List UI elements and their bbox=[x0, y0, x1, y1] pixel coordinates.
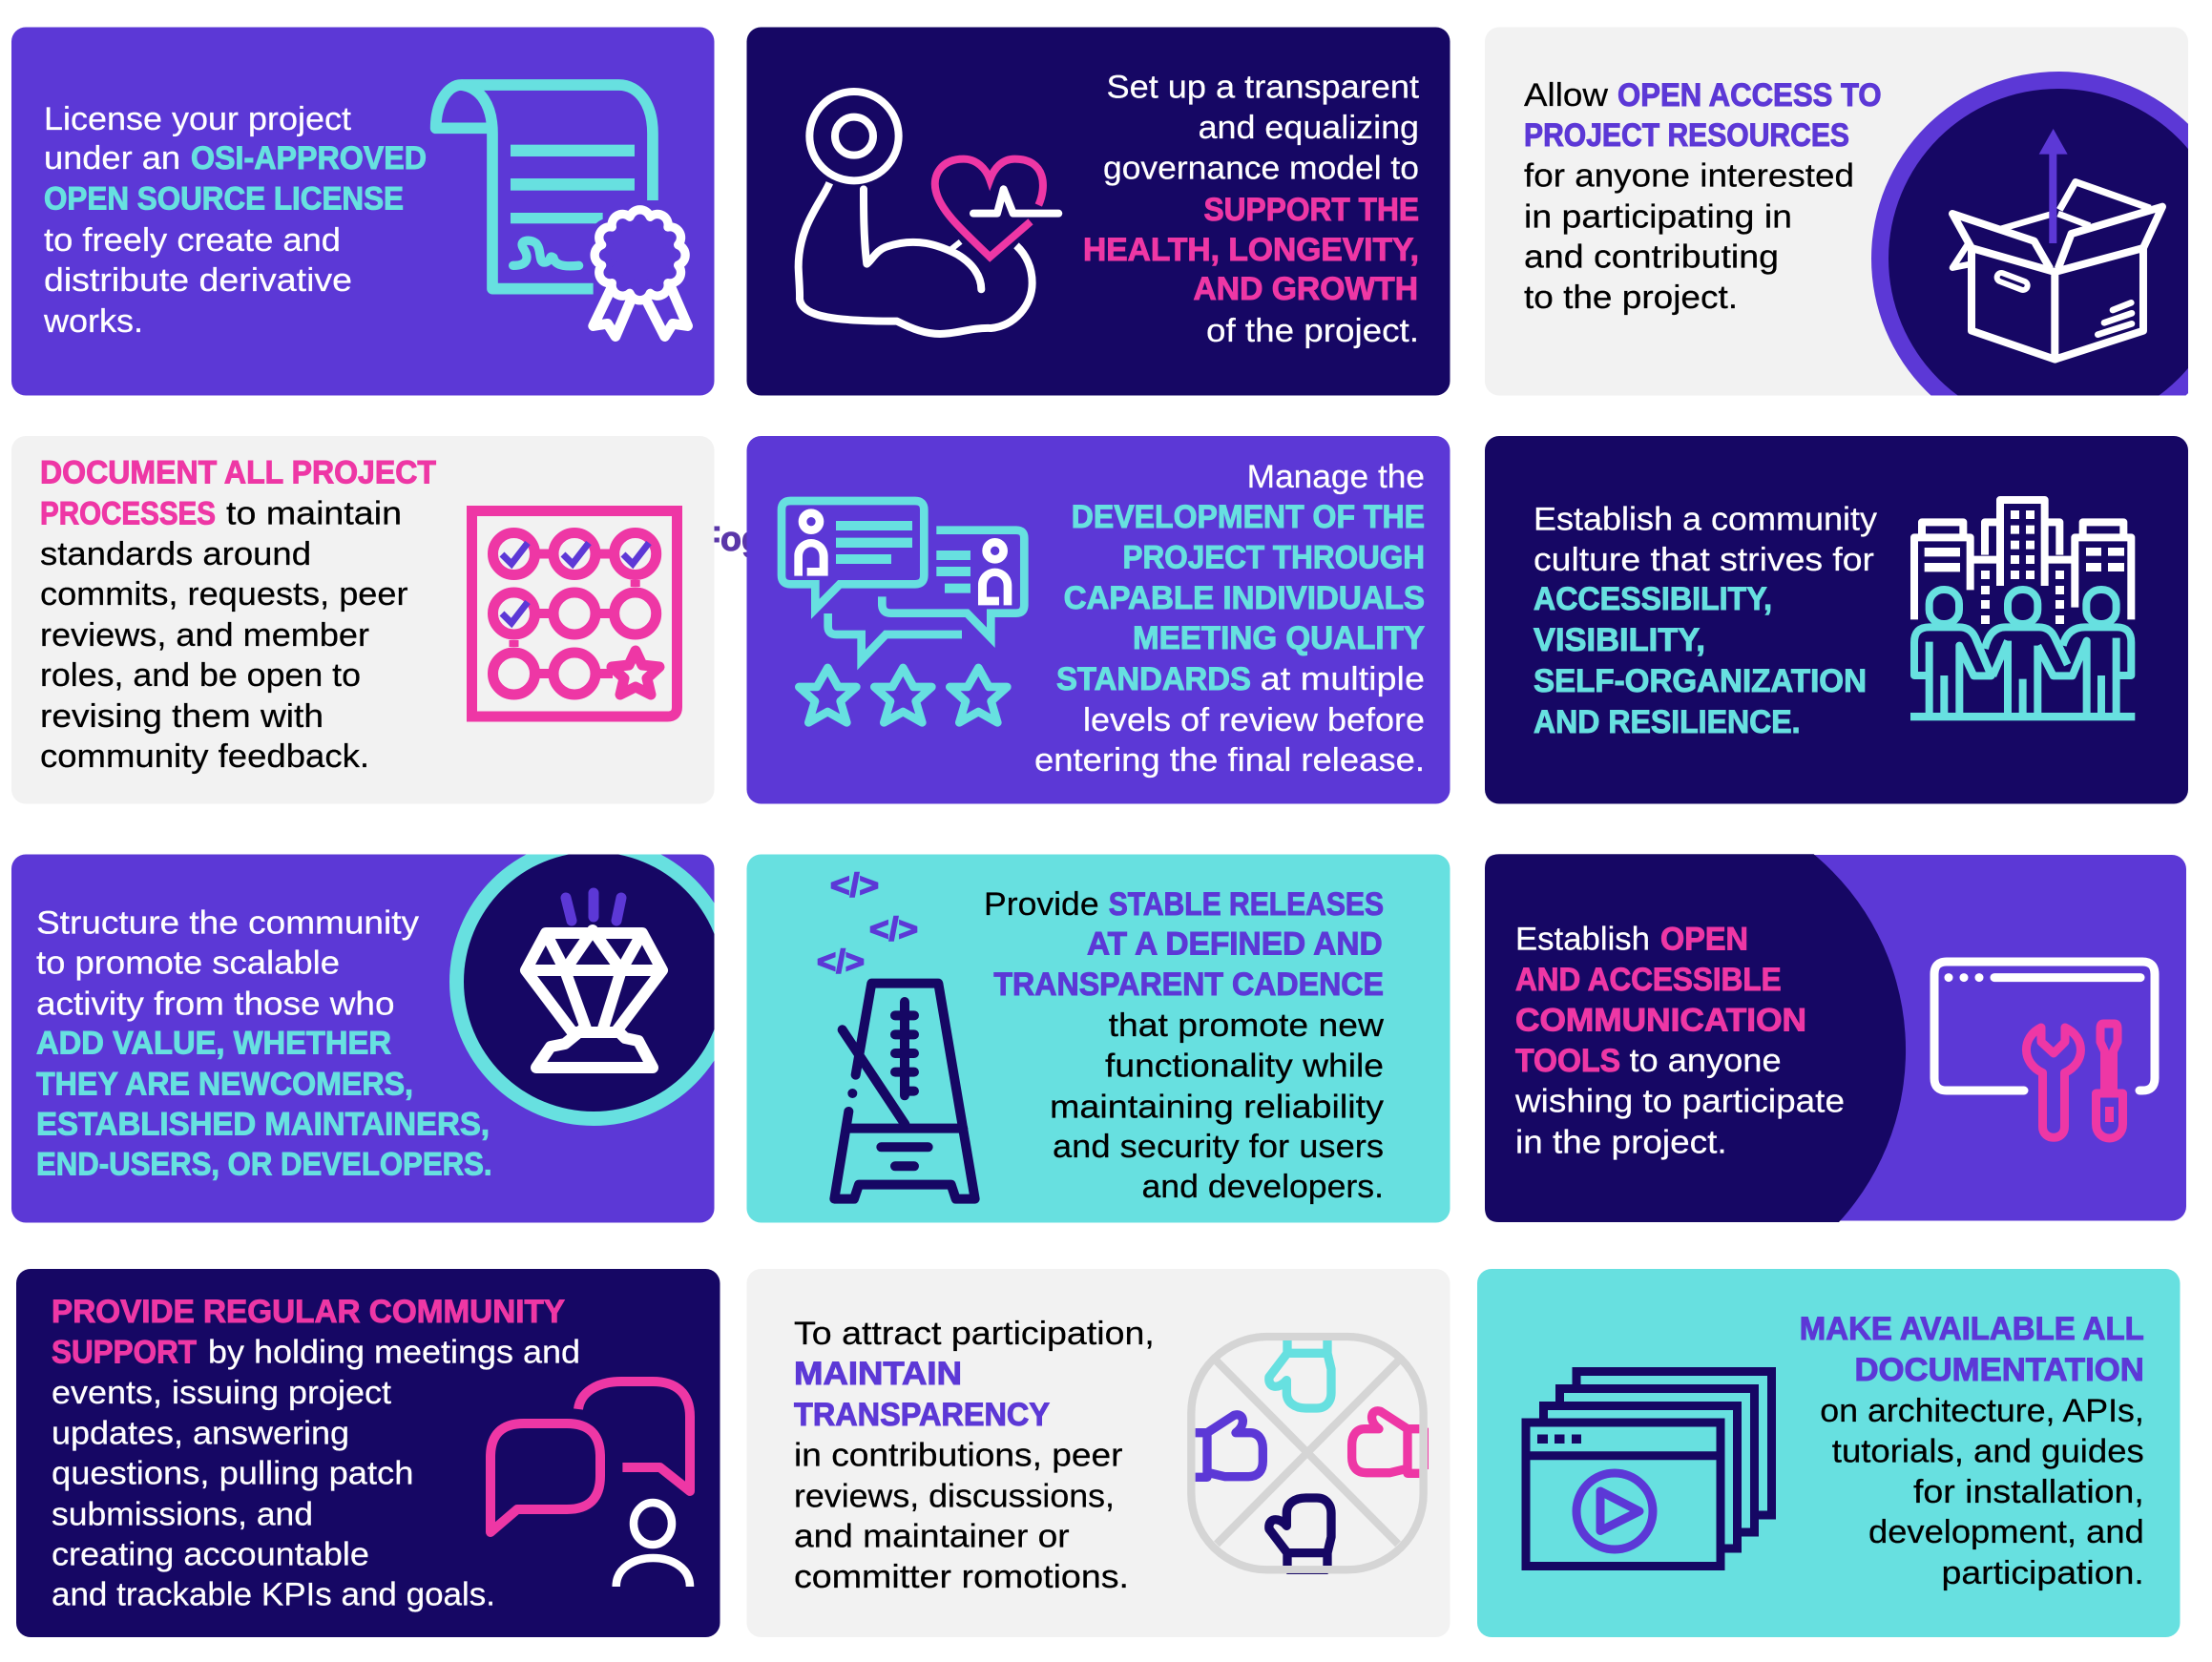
text: documentation bbox=[1800, 1311, 2144, 1591]
text: communication tools: TOOLS bbox=[1515, 1043, 1620, 1079]
shape: navy curved section bbox=[1485, 854, 1906, 1222]
text: document processes: commits, requests, peer bbox=[40, 576, 408, 613]
panel: community culture bbox=[1485, 436, 2188, 803]
text: transparency: To attract participation, bbox=[794, 1316, 1155, 1352]
icon: code tags bbox=[817, 868, 918, 981]
text: governance: governance model to bbox=[1103, 151, 1419, 187]
text: community culture: VISIBILITY, bbox=[1534, 622, 1705, 658]
text: stable releases: and security for users bbox=[1053, 1129, 1384, 1165]
text: documentation: development, and bbox=[1868, 1514, 2144, 1550]
text: structure community bbox=[36, 904, 492, 1183]
text: transparency: committer romotions. bbox=[794, 1559, 1129, 1595]
text: open access: OPEN ACCESS TO bbox=[1617, 77, 1882, 114]
icon: browser window with tools bbox=[1934, 962, 2155, 1138]
icon: person with speech bubbles bbox=[490, 1382, 690, 1587]
text: communication tools: in the project. bbox=[1515, 1124, 1727, 1160]
panel: documentation bbox=[1477, 1269, 2180, 1637]
text: structure community: activity from those who bbox=[36, 987, 394, 1023]
text: stable releases: Provide bbox=[984, 886, 1099, 923]
text: development management bbox=[1034, 459, 1425, 779]
text: governance: Set up a transparent bbox=[1107, 69, 1420, 105]
text: community culture: ACCESSIBILITY, bbox=[1534, 581, 1772, 617]
text: document processes: reviews, and member bbox=[40, 617, 369, 654]
text: governance: of the project. bbox=[1206, 313, 1419, 349]
text: document processes: roles, and be open to bbox=[40, 657, 361, 694]
text: transparency: TRANSPARENCY bbox=[794, 1397, 1050, 1433]
text: development management: entering the final release. bbox=[1034, 742, 1425, 779]
icon: process checklist board bbox=[471, 511, 678, 717]
text: structure community: to promote scalable bbox=[36, 945, 340, 982]
text: open access: and contributing bbox=[1524, 239, 1779, 275]
text: community support: submissions, and bbox=[52, 1496, 313, 1532]
text: license: under an bbox=[44, 140, 180, 177]
text: stable releases: functionality while bbox=[1105, 1048, 1384, 1084]
icon: stacked video windows bbox=[1526, 1372, 1771, 1567]
panel: stable releases bbox=[746, 855, 1450, 1223]
text: document processes: PROCESSES bbox=[40, 495, 216, 531]
text: document processes: to maintain bbox=[226, 495, 402, 531]
text: structure community: ESTABLISHED MAINTAINERS, bbox=[36, 1107, 490, 1143]
text: license: License your project bbox=[44, 101, 352, 137]
text: open access: Allow bbox=[1524, 77, 1608, 114]
text: communication tools: Establish bbox=[1515, 922, 1650, 958]
text: transparency: and maintainer or bbox=[794, 1519, 1070, 1555]
text: community support: creating accountable bbox=[52, 1537, 369, 1573]
text: community support: questions, pulling patch bbox=[52, 1456, 413, 1492]
text: documentation: MAKE AVAILABLE ALL bbox=[1800, 1311, 2144, 1347]
icon: certificate scroll with rosette bbox=[436, 85, 688, 337]
text: open access: to the project. bbox=[1524, 280, 1738, 316]
icon: reviewer speech bubbles and stars bbox=[782, 501, 1024, 722]
text: documentation: tutorials, and guides bbox=[1832, 1433, 2144, 1469]
text: documentation: for installation, bbox=[1913, 1474, 2144, 1510]
panel: open access bbox=[1485, 27, 2188, 395]
text: structure community: END-USERS, OR DEVELOPERS. bbox=[36, 1147, 492, 1183]
icon: people holding hands before city bbox=[1910, 500, 2135, 720]
text: document processes: standards around bbox=[40, 536, 311, 572]
text: stable releases: STABLE RELEASES bbox=[1109, 886, 1384, 923]
text: community culture: culture that strives for bbox=[1534, 542, 1874, 578]
text: development management: STANDARDS bbox=[1056, 661, 1251, 697]
text: community support: updates, answering bbox=[52, 1416, 349, 1452]
text: license: OSI-APPROVED bbox=[191, 140, 427, 177]
text: communication tools: OPEN bbox=[1660, 922, 1748, 958]
text: community support: SUPPORT bbox=[52, 1335, 197, 1371]
text: communication tools bbox=[1514, 922, 1845, 1160]
text: community culture: SELF-ORGANIZATION bbox=[1534, 663, 1867, 699]
text: development management: at multiple bbox=[1261, 661, 1425, 697]
text: license: distribute derivative bbox=[44, 262, 352, 299]
panel: document processes bbox=[11, 436, 714, 803]
text: transparency bbox=[794, 1316, 1155, 1595]
panel: governance bbox=[746, 27, 1450, 395]
panel: transparency bbox=[746, 1269, 1450, 1637]
text: transparency: in contributions, peer bbox=[794, 1437, 1122, 1473]
icon: code tags: </> bbox=[817, 945, 865, 981]
text: documentation: DOCUMENTATION bbox=[1855, 1352, 2144, 1388]
text: development management: CAPABLE INDIVIDUALS bbox=[1064, 580, 1425, 616]
text: development management: MEETING QUALITY bbox=[1133, 620, 1425, 656]
icon: metronome bbox=[834, 984, 975, 1199]
text: community support: events, issuing project bbox=[52, 1375, 392, 1411]
text: open access: for anyone interested bbox=[1524, 158, 1854, 195]
text: open access bbox=[1524, 77, 1882, 316]
panel: community support bbox=[16, 1269, 720, 1637]
text: document processes: community feedback. bbox=[40, 738, 369, 775]
icon: code tags: </> bbox=[830, 868, 879, 904]
icon: flexed arm with dumbbell and heart bbox=[799, 92, 1058, 334]
text: community support: by holding meetings and bbox=[208, 1335, 580, 1371]
text: license: OPEN SOURCE LICENSE bbox=[44, 181, 404, 218]
text: communication tools: AND ACCESSIBLE bbox=[1515, 962, 1782, 998]
text: communication tools: wishing to participate bbox=[1514, 1084, 1845, 1120]
text: transparency: reviews, discussions, bbox=[794, 1479, 1115, 1515]
panel: structure community bbox=[11, 838, 738, 1223]
icon: diamond in circle bbox=[449, 855, 714, 1126]
text: transparency: MAINTAIN bbox=[794, 1356, 962, 1392]
text: documentation: on architecture, APIs, bbox=[1820, 1393, 2144, 1429]
text: stable releases: AT A DEFINED AND bbox=[1087, 926, 1383, 963]
text: document processes bbox=[40, 455, 436, 775]
text: communication tools: to anyone bbox=[1630, 1043, 1782, 1079]
text: community culture: Establish a community bbox=[1534, 502, 1877, 538]
text: license bbox=[43, 101, 427, 340]
text: license: works. bbox=[43, 303, 143, 340]
text: open access: in participating in bbox=[1524, 198, 1792, 235]
text: development management: levels of review before bbox=[1083, 702, 1425, 738]
text: governance: and equalizing bbox=[1199, 110, 1419, 146]
text: documentation: participation. bbox=[1941, 1555, 2144, 1591]
text: community culture: AND RESILIENCE. bbox=[1534, 704, 1800, 740]
text: community culture bbox=[1534, 502, 1877, 740]
text: governance bbox=[1083, 69, 1420, 349]
text: community support bbox=[52, 1294, 580, 1613]
text: structure community: THEY ARE NEWCOMERS, bbox=[36, 1066, 413, 1102]
text: structure community: ADD VALUE, WHETHER bbox=[36, 1026, 391, 1062]
text: structure community: Structure the community bbox=[36, 904, 419, 941]
panel: communication tools bbox=[1485, 854, 2186, 1222]
text: license: to freely create and bbox=[44, 222, 341, 259]
text: stable releases: and developers. bbox=[1141, 1169, 1384, 1205]
text: document processes: DOCUMENT ALL PROJECT bbox=[40, 455, 436, 491]
icon: code tags: </> bbox=[869, 912, 918, 948]
text: stable releases: that promote new bbox=[1109, 1008, 1384, 1044]
icon: open box in circle bbox=[1871, 72, 2188, 395]
text: development management: PROJECT THROUGH bbox=[1122, 540, 1425, 576]
text: stable releases bbox=[984, 886, 1384, 1205]
text: development management: Manage the bbox=[1247, 459, 1425, 495]
text: governance: AND GROWTH bbox=[1193, 271, 1418, 307]
panel: development management bbox=[746, 436, 1450, 803]
text: stable releases: maintaining reliability bbox=[1050, 1090, 1384, 1126]
text: communication tools: COMMUNICATION bbox=[1515, 1003, 1806, 1039]
text: open access: PROJECT RESOURCES bbox=[1524, 117, 1849, 154]
text: stable releases: TRANSPARENT CADENCE bbox=[993, 966, 1384, 1003]
text: development management: DEVELOPMENT OF THE bbox=[1072, 499, 1425, 535]
text: document processes: revising them with bbox=[40, 698, 323, 735]
text: governance: HEALTH, LONGEVITY, bbox=[1083, 232, 1419, 268]
stray clipped text fragment: Fog bbox=[699, 519, 762, 558]
panel: license bbox=[11, 27, 714, 395]
icon: four mittens in rounded frame bbox=[1191, 1337, 1429, 1574]
text: governance: SUPPORT THE bbox=[1204, 192, 1419, 228]
text: community support: and trackable KPIs and goals. bbox=[52, 1577, 495, 1613]
text: community support: PROVIDE REGULAR COMMUNITY bbox=[52, 1294, 565, 1330]
